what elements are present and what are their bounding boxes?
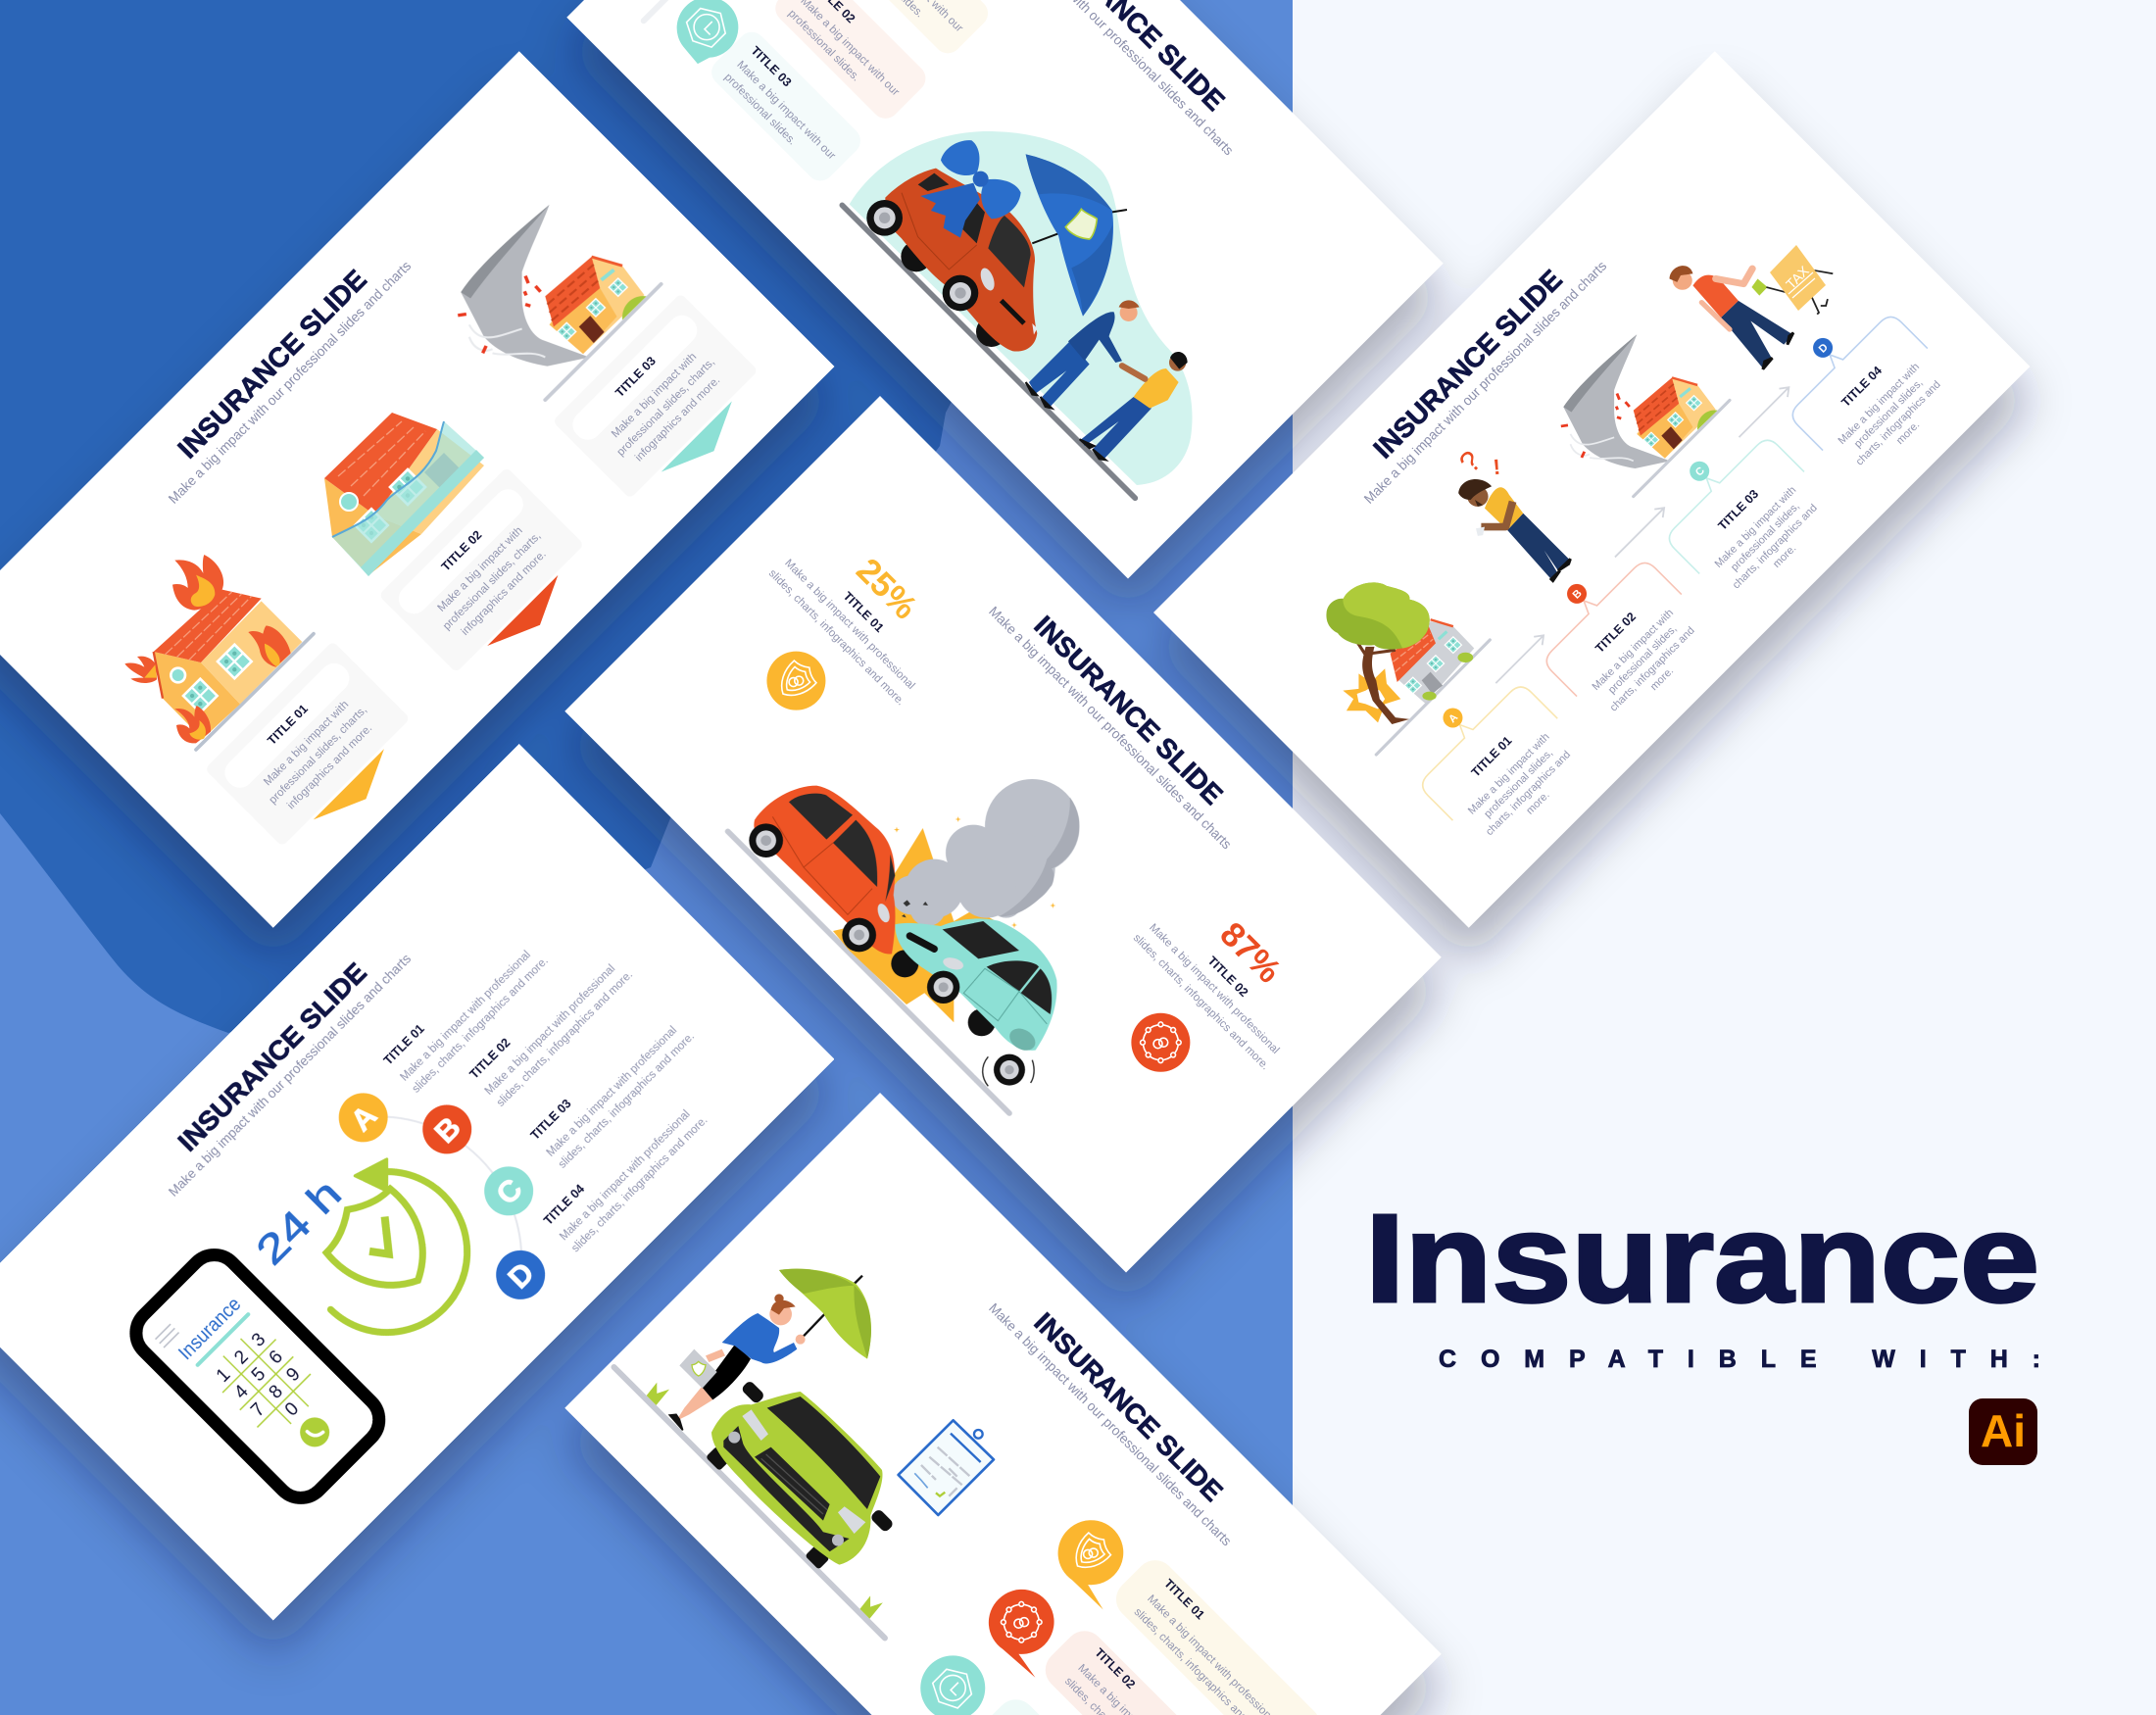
illustration: flooded house xyxy=(324,413,484,576)
text block: title 02: TITLE 02 xyxy=(467,1036,513,1082)
illustration: smartphone xyxy=(125,1245,390,1508)
step C: charts, infographics and xyxy=(1731,502,1820,591)
badge D: D xyxy=(501,1255,541,1296)
step C: C xyxy=(1693,465,1707,479)
card: title 03 xyxy=(969,1691,1189,1715)
arrow 1 xyxy=(1492,631,1547,687)
badge A: A xyxy=(344,1098,383,1138)
icon: question mark: ? xyxy=(1453,445,1488,479)
card: title 02: infographics and more. xyxy=(460,549,549,638)
card: title 01: TITLE 01 xyxy=(265,702,311,748)
stat: 25% block: Make a big impact with professional xyxy=(782,558,917,692)
stat: 87% block: 87% xyxy=(1212,915,1289,991)
icon: orange network badge xyxy=(1119,1001,1202,1084)
stat: 25% block xyxy=(766,509,965,708)
text block: title 01: TITLE 01 xyxy=(381,1022,427,1067)
step B: charts, infographics and xyxy=(1608,624,1697,714)
panel: slide claim process timeline xyxy=(1153,51,2030,928)
card: title 02 xyxy=(1038,1623,1257,1715)
card: title 03: TITLE 03 xyxy=(612,354,659,400)
step D: D xyxy=(1817,342,1831,356)
illustration: smartphone: 6 xyxy=(266,1347,287,1369)
step B: professional slides, xyxy=(1606,623,1680,696)
card: title 03: TITLE 03 xyxy=(749,44,794,89)
connector arc xyxy=(364,1080,559,1275)
card: title 01 xyxy=(834,0,994,59)
stat: 25% block: slides, charts, infographics and more. xyxy=(766,567,906,708)
stat: 87% block: TITLE 02 xyxy=(1205,954,1250,1000)
illustration: crash ground, explosion, smoke and cars xyxy=(728,779,1080,1113)
step C: Make a big impact with xyxy=(1713,484,1798,570)
step A: professional slides, xyxy=(1482,747,1555,820)
text block: title 04 xyxy=(541,1086,710,1254)
stat: 87% block xyxy=(1131,873,1330,1072)
text block: title 02 xyxy=(466,941,635,1109)
step D xyxy=(1765,289,1964,488)
illustration: grass tufts xyxy=(645,1380,884,1619)
card: title 03: professional slides. xyxy=(722,72,798,148)
step B: more. xyxy=(1648,665,1676,693)
card: title 01: Make a big impact with xyxy=(262,699,351,788)
subheading: Make a big impact with our professional slides and charts xyxy=(986,1299,1235,1548)
icon: Adobe Illustrator: Ai xyxy=(1981,1405,2026,1456)
icon: Adobe Illustrator xyxy=(1969,1398,2037,1465)
card: title 03 xyxy=(706,26,866,186)
text block: title 03: slides, charts, infographics and more. xyxy=(557,1031,697,1171)
text block: title 03: Make a big impact with professional xyxy=(545,1025,679,1159)
heading: INSURANCE SLIDE xyxy=(1367,264,1568,465)
heading: INSURANCE SLIDE xyxy=(1028,610,1229,810)
text block: title 02: slides, charts, infographics and more. xyxy=(495,969,635,1109)
step A xyxy=(1395,659,1594,858)
illustration: green car xyxy=(706,1380,895,1570)
icon: clipboard policy xyxy=(899,1420,994,1515)
card: title 03 xyxy=(553,293,776,516)
step B: B xyxy=(1571,588,1585,602)
icon: exclamation mark: ! xyxy=(1492,455,1501,479)
text block: title 04: Make a big impact with professional xyxy=(558,1108,693,1243)
illustration: burning house xyxy=(124,555,314,750)
illustration: smartphone: 8 xyxy=(266,1382,287,1403)
illustration: mint blob, car, umbrella and handshake xyxy=(842,131,1193,498)
illustration: tax document xyxy=(1770,245,1826,311)
step C: more. xyxy=(1771,543,1798,570)
text block: title 01 xyxy=(381,926,551,1096)
step D: more. xyxy=(1894,419,1922,447)
text block: title 04: slides, charts, infographics and more. xyxy=(569,1114,710,1254)
timeline stroke xyxy=(640,0,786,25)
text block: title 04: TITLE 04 xyxy=(541,1182,587,1228)
badge B xyxy=(413,1095,482,1164)
card: title 01: infographics and more. xyxy=(285,722,374,811)
step C xyxy=(1642,413,1840,612)
illustration: tax document: TAX xyxy=(1783,263,1812,292)
badge A xyxy=(328,1083,398,1152)
step A: A xyxy=(1446,711,1460,725)
step B: Make a big impact with xyxy=(1591,607,1676,693)
panel: slide 24 hour phone support xyxy=(0,744,834,1621)
stat: 25% block: TITLE 01 xyxy=(841,589,886,635)
illustration: smartphone: 5 xyxy=(248,1364,270,1386)
heading: INSURANCE SLIDE xyxy=(172,956,372,1157)
stat: 87% block: Make a big impact with professional xyxy=(1147,922,1281,1056)
title: Insurance: Insurance xyxy=(1365,1189,2039,1329)
illustration: smartphone: 1 xyxy=(213,1365,234,1387)
card: title 02 xyxy=(378,467,603,691)
step B: TITLE 02 xyxy=(1592,610,1639,656)
subtitle: compatible with: COMPATIBLE WITH: xyxy=(1439,1346,2040,1373)
step D: professional slides, xyxy=(1852,377,1926,450)
text block: title 03: TITLE 03 xyxy=(528,1097,574,1143)
illustration: smartphone: Insurance xyxy=(174,1294,245,1364)
icon: orange pin xyxy=(727,0,813,6)
heading: INSURANCE SLIDE xyxy=(1028,1306,1229,1507)
arrow 2 xyxy=(1611,504,1668,562)
illustration: woman with umbrella xyxy=(669,1269,871,1430)
card: title 03: Make a big impact with our xyxy=(734,59,838,162)
step A: Make a big impact with xyxy=(1466,731,1552,817)
illustration: smartphone: 0 xyxy=(281,1398,303,1421)
step D: charts, infographics and xyxy=(1854,378,1943,467)
panel: slide car crash xyxy=(564,396,1442,1272)
arrow 3 xyxy=(1735,383,1793,441)
illustration: man paying tax xyxy=(1670,266,1833,369)
background: dark blue wave xyxy=(0,0,1166,1033)
badge D xyxy=(486,1241,556,1309)
badge B: B xyxy=(427,1109,467,1150)
background: light blue panel xyxy=(0,0,1293,1715)
pin: orange xyxy=(975,1576,1079,1680)
subheading: Make a big impact with our professional slides and charts xyxy=(165,258,414,507)
heading: INSURANCE SLIDE xyxy=(172,264,372,465)
step B xyxy=(1519,535,1718,734)
text block: title 03 xyxy=(527,1002,697,1171)
icon: shield check xyxy=(315,1177,450,1312)
card: title 03: infographics and more. xyxy=(633,374,722,464)
card: title 03: Make a big impact with xyxy=(610,351,699,440)
illustration: confused man xyxy=(1458,479,1570,581)
card: title 03: professional slides, charts, xyxy=(615,357,717,459)
text block: title 01: Make a big impact with professional xyxy=(399,949,533,1084)
illustration: smartphone: 3 xyxy=(248,1330,270,1351)
subheading: Make a big impact with our professional slides and charts xyxy=(1360,258,1609,507)
step A: charts, infographics and xyxy=(1484,749,1573,838)
card: title 01: TITLE 01 xyxy=(1161,1577,1207,1622)
subheading: Make a big impact with our professional slides and charts xyxy=(986,603,1235,852)
pin: yellow xyxy=(1045,1507,1149,1611)
illustration: falling tree on house xyxy=(1326,582,1490,755)
panel: slide gift car and handshake xyxy=(566,0,1444,578)
card: title 01: professional slides, charts, xyxy=(268,705,369,807)
text block: title 01: slides, charts, infographics and more. xyxy=(411,956,551,1096)
step C: TITLE 03 xyxy=(1715,487,1761,533)
card: title 02: TITLE 02 xyxy=(1092,1645,1138,1691)
ground line xyxy=(610,1363,889,1642)
illustration: smartphone: 4 xyxy=(230,1381,253,1403)
card: title 02: TITLE 02 xyxy=(439,528,484,573)
icon: circular arrow xyxy=(276,1141,501,1365)
card: title 01 xyxy=(205,641,428,864)
step D: Make a big impact with xyxy=(1837,361,1922,447)
icon: teal pin xyxy=(663,0,751,73)
card: title 02 xyxy=(769,0,931,124)
badge C: C xyxy=(489,1171,529,1211)
card: title 02: professional slides. xyxy=(786,8,861,83)
step C: professional slides, xyxy=(1729,501,1802,573)
step D: TITLE 04 xyxy=(1838,364,1885,410)
icon: yellow shield badge xyxy=(755,639,838,722)
stat: 87% block: slides, charts, infographics and more. xyxy=(1131,932,1271,1072)
illustration: smartphone: 2 xyxy=(230,1347,253,1369)
illustration: tornado and house xyxy=(458,205,662,400)
pin: teal xyxy=(907,1642,999,1715)
card: title 01 xyxy=(1108,1552,1328,1715)
card: title 02: Make a big impact with xyxy=(436,525,525,614)
panel: slide green car and policy xyxy=(564,1093,1442,1715)
step A: TITLE 01 xyxy=(1469,734,1514,779)
card: title 02: professional slides, charts, xyxy=(441,530,543,632)
badge C xyxy=(474,1156,544,1226)
illustration: tornado and house xyxy=(1561,334,1730,497)
illustration: smartphone: 7 xyxy=(247,1399,270,1421)
step A: more. xyxy=(1524,789,1552,817)
subheading: Make a big impact with our professional slides and charts xyxy=(165,951,414,1200)
label: 24 h: 24 h xyxy=(247,1170,350,1273)
illustration: smartphone: 9 xyxy=(282,1364,305,1386)
panel: slide disasters (fire, flood, tornado) xyxy=(0,51,834,928)
stat: 25% block: 25% xyxy=(849,551,924,626)
text block: title 02: Make a big impact with professional xyxy=(483,963,617,1098)
